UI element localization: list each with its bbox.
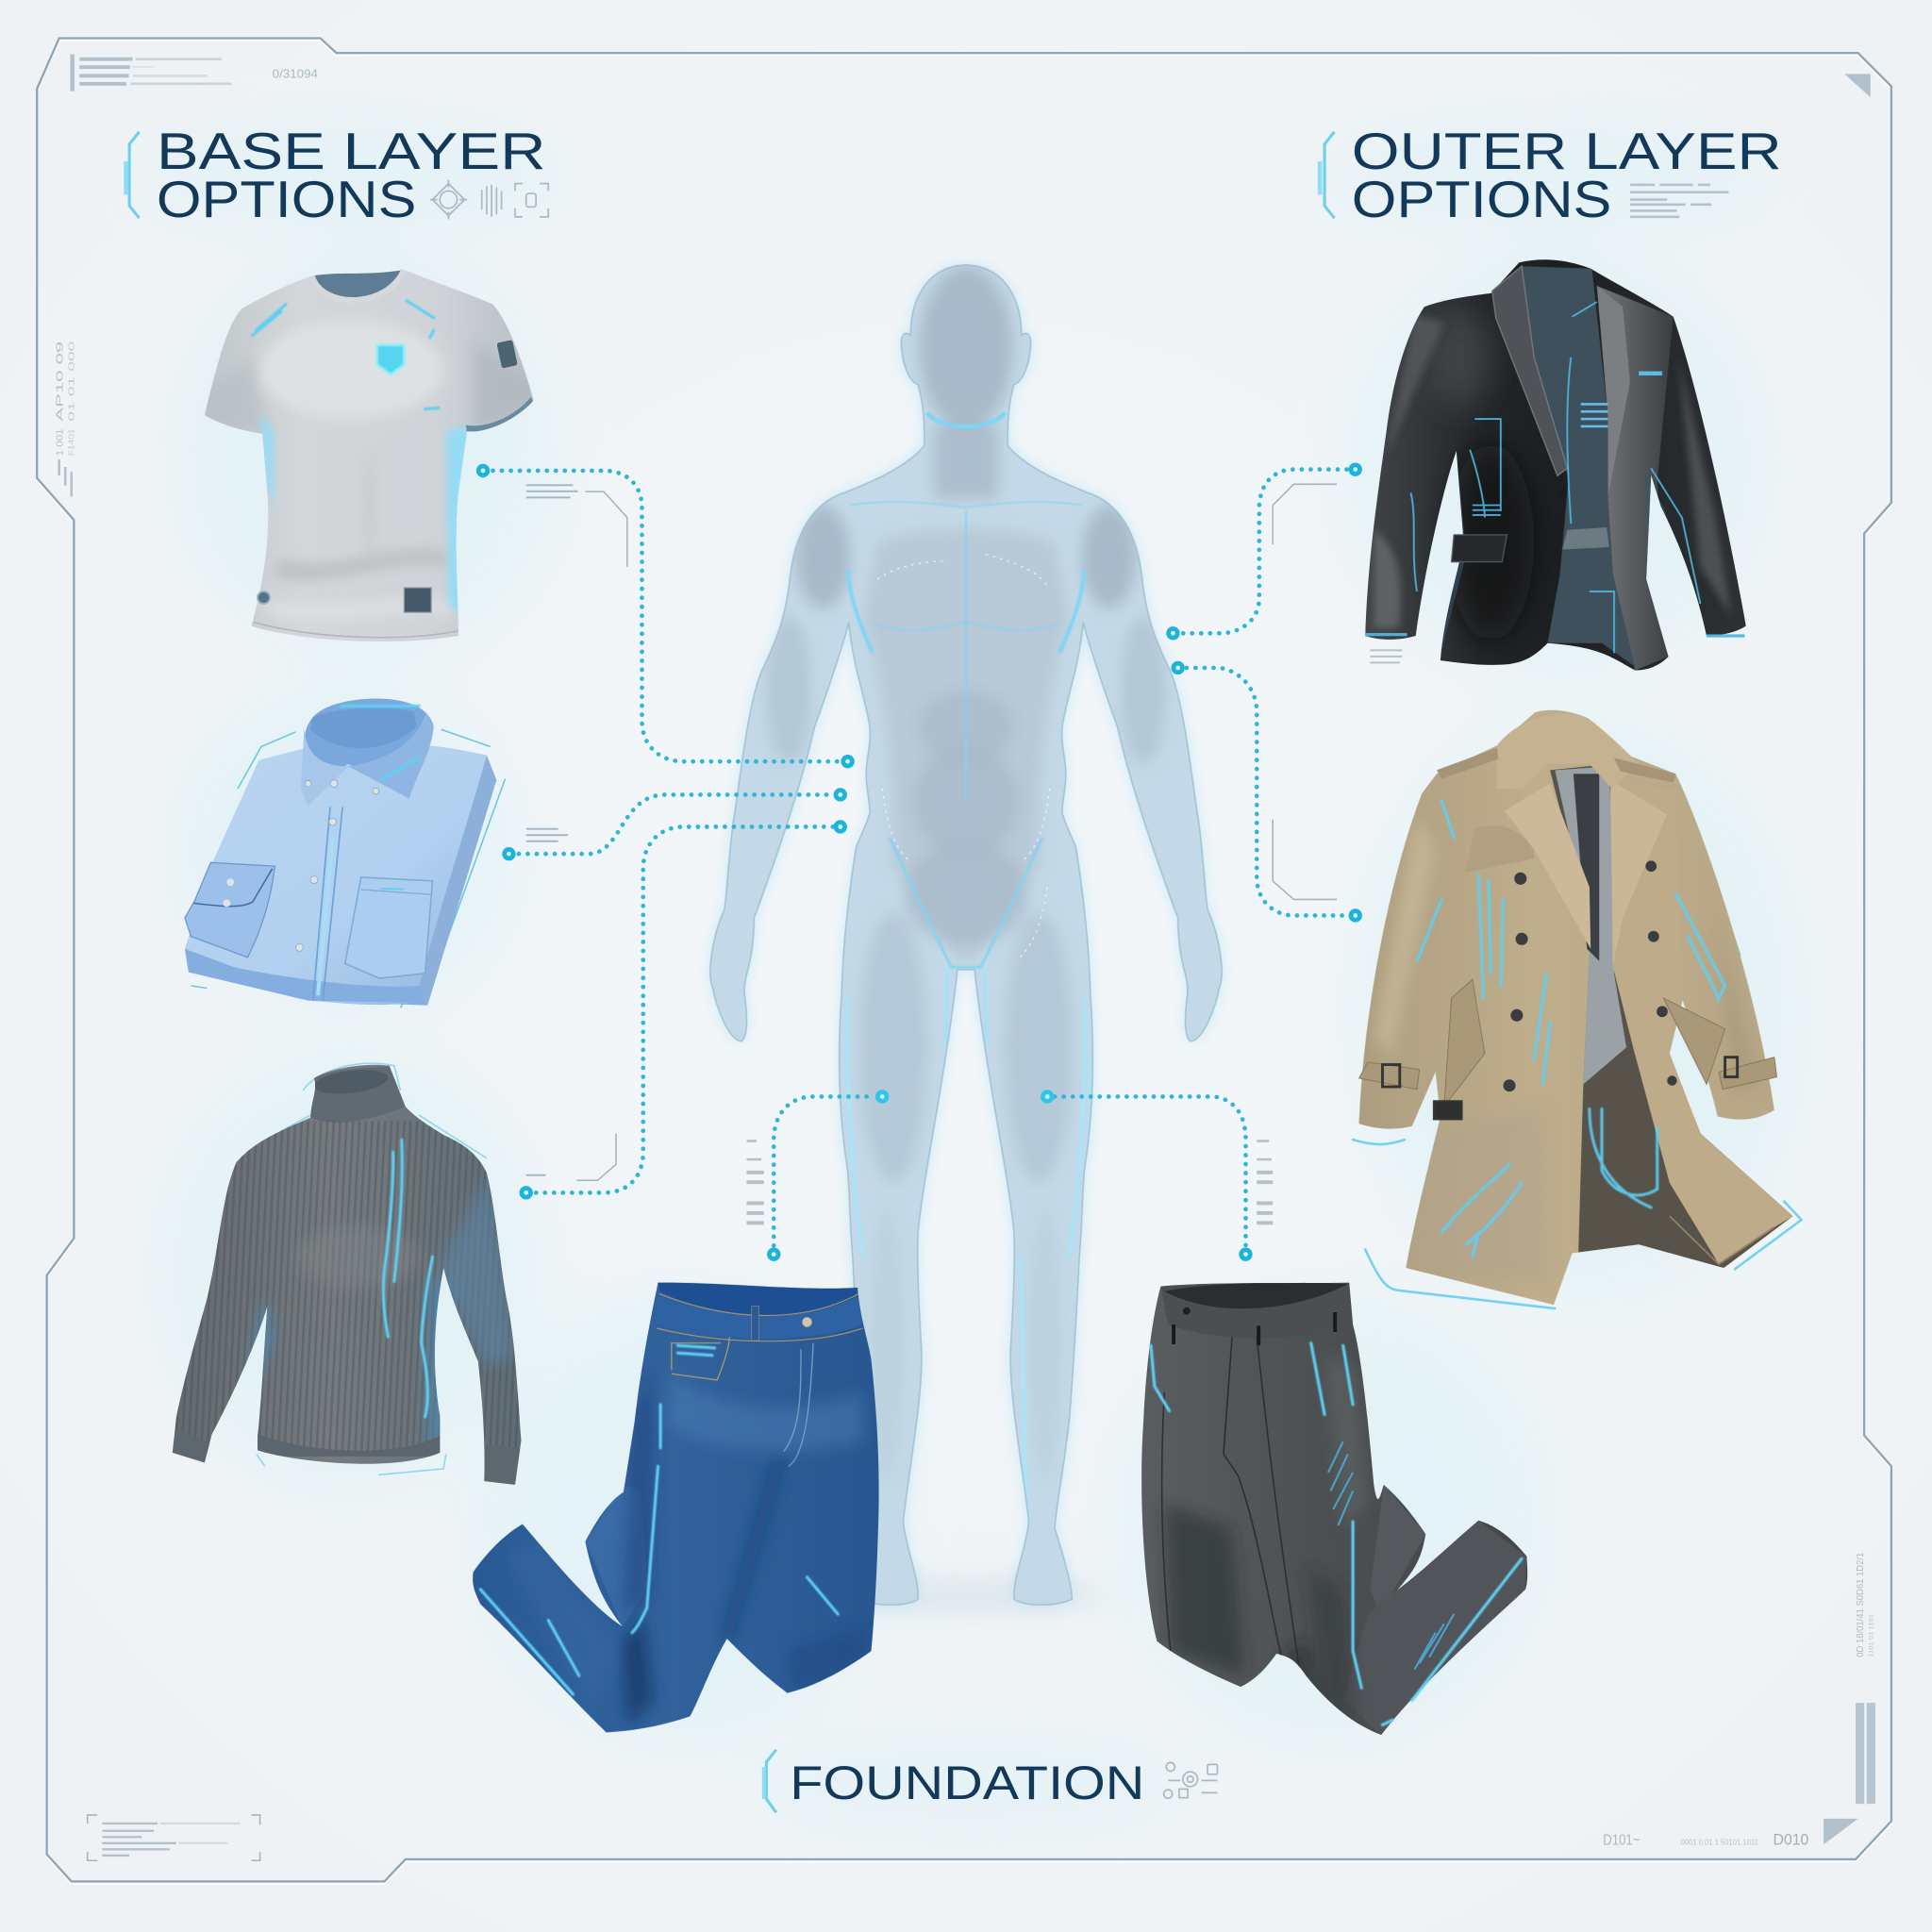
collar bbox=[304, 699, 434, 801]
hem patches bbox=[258, 591, 270, 604]
buttons bbox=[295, 780, 379, 951]
connector: base layer t-shirt bbox=[476, 464, 855, 768]
black blazer bbox=[1356, 253, 1762, 677]
glowing body lines bbox=[847, 413, 1091, 1528]
bottom-right readouts: 0D 18/01/41 S0D61 1D2/1 bbox=[1856, 1553, 1866, 1657]
placket bbox=[313, 808, 342, 1001]
belt loop and rivet bbox=[752, 1306, 759, 1341]
connector: foundation trousers bbox=[1041, 1090, 1253, 1261]
heading: outer layer options bbox=[1318, 122, 1782, 228]
connector: outer layer blazer bbox=[1166, 462, 1362, 641]
left side vertical readout: AP10 09 bbox=[56, 341, 66, 422]
buttons bbox=[1558, 489, 1567, 497]
connector: foundation jeans bbox=[767, 1090, 889, 1261]
bottom-left data box bbox=[88, 1815, 260, 1860]
lapels bbox=[1492, 266, 1567, 475]
heading: base layer options: BASE LAYER bbox=[157, 122, 546, 180]
sleeve and fold shading bbox=[206, 325, 522, 613]
bracket bbox=[129, 132, 140, 218]
micro callouts near connectors bbox=[526, 484, 1337, 1224]
top-right corner marker bbox=[1844, 74, 1871, 97]
mannequin figure bbox=[710, 265, 1222, 1613]
shield badge bbox=[377, 345, 404, 375]
turtleneck sweater bbox=[172, 1062, 521, 1485]
heading: base layer options: OPTIONS bbox=[157, 170, 416, 228]
folded blue shirt bbox=[185, 699, 506, 1008]
back leg bbox=[585, 1485, 647, 1626]
bottom-right readouts: 1101 01 1101 bbox=[1868, 1614, 1874, 1657]
blue jeans bbox=[462, 1275, 887, 1743]
top-left data readout: 0/31094 bbox=[273, 66, 318, 80]
pocket flap bbox=[1452, 535, 1507, 562]
circuit accents bbox=[1417, 801, 1725, 1257]
heading: foundation bbox=[762, 1750, 1217, 1812]
left side vertical readout bbox=[56, 340, 75, 496]
heading: outer layer options: OUTER LAYER bbox=[1352, 122, 1782, 180]
left side vertical readout: 1 001 bbox=[56, 428, 66, 456]
connector: base layer sweater bbox=[520, 820, 847, 1200]
trench coat bbox=[1349, 702, 1805, 1319]
sleeve patch bbox=[496, 340, 518, 369]
left side vertical readout: 01 01 000 bbox=[67, 340, 75, 422]
small tech icons bbox=[1164, 1762, 1217, 1798]
interior bbox=[1550, 764, 1792, 1268]
circuit lines bbox=[1365, 302, 1744, 653]
top-left data readout bbox=[70, 54, 318, 92]
buttons bbox=[1503, 860, 1677, 1091]
pocket bbox=[345, 877, 432, 978]
t-shirt bbox=[197, 258, 542, 653]
left lapel and storm flap bbox=[1465, 825, 1534, 873]
waistband bbox=[658, 1283, 858, 1318]
bracket bbox=[766, 1750, 776, 1812]
cuff notes bbox=[1370, 649, 1402, 663]
connector: outer layer coat bbox=[1171, 661, 1362, 923]
heading: outer layer options: OPTIONS bbox=[1352, 170, 1611, 228]
inner panel bbox=[1522, 266, 1635, 667]
callout brackets bbox=[191, 729, 506, 1008]
small tech icons bbox=[430, 180, 548, 219]
cuff bbox=[185, 862, 275, 958]
right coat panel bbox=[1610, 789, 1792, 1264]
heading: foundation: FOUNDATION bbox=[790, 1757, 1144, 1809]
small data lines bbox=[1630, 184, 1728, 218]
wash highlights and shadows bbox=[506, 1368, 869, 1725]
glow halos behind garments bbox=[142, 125, 1792, 1823]
bottom-right readouts bbox=[1603, 1553, 1875, 1848]
connector: base layer shirt bbox=[502, 788, 847, 860]
collar bbox=[1497, 713, 1639, 789]
bottom-right readouts: 0001 0.01 1 50101.1011 bbox=[1681, 1838, 1758, 1846]
heading: base layer options bbox=[124, 122, 548, 228]
charcoal trousers bbox=[1134, 1275, 1541, 1743]
bracket bbox=[1324, 132, 1335, 218]
left side vertical readout: F1401 bbox=[67, 429, 75, 456]
bottom-right readouts: D101~ bbox=[1603, 1832, 1640, 1848]
right front panel bbox=[1597, 286, 1674, 671]
inner shading bbox=[765, 266, 1167, 1181]
belt and cuffs bbox=[1359, 979, 1776, 1107]
bottom-right readouts: D010 bbox=[1774, 1830, 1808, 1848]
